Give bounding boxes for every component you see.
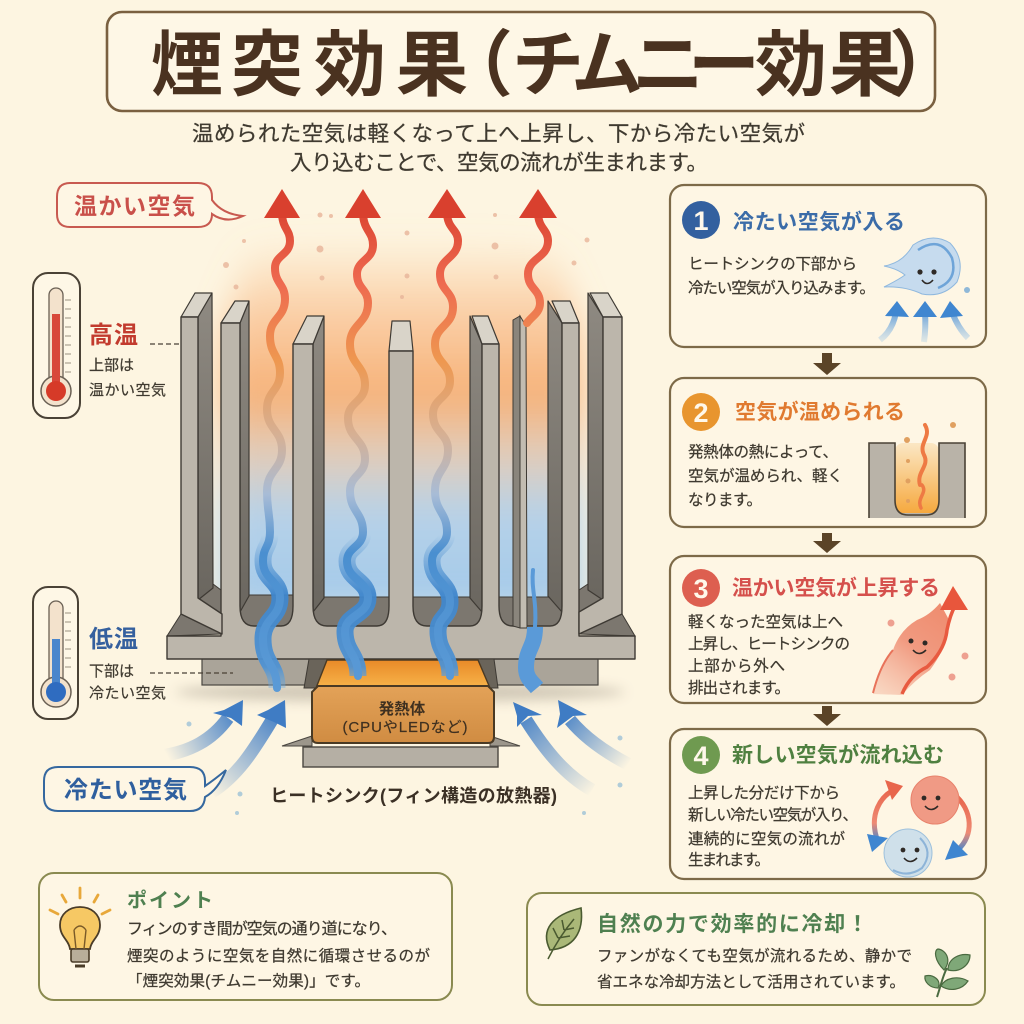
point text: 「煙突効果(チムニー効果)」です。	[127, 972, 370, 990]
step 4 text: 連続的に空気の流れが	[688, 830, 845, 848]
step 3 text: 排出されます。	[688, 679, 790, 697]
label: high temperature: 高温	[89, 322, 138, 349]
cold air inflow arrows	[160, 700, 628, 792]
icon: light bulb	[50, 888, 110, 966]
natural cooling text: ファンがなくても空気が流れるため、静かで	[597, 947, 912, 965]
icon: cool air character	[880, 238, 970, 342]
callout: warm air: 温かい空気	[74, 193, 195, 219]
step 4 text: 上昇した分だけ下から	[688, 784, 840, 802]
point heading: ポイント	[127, 889, 213, 912]
step 1 heading: 冷たい空気が入る	[733, 210, 905, 234]
heat source label	[342, 700, 468, 736]
intro text	[192, 122, 805, 175]
callout: cool air: 冷たい空気	[64, 777, 187, 804]
callout: cool air	[44, 767, 226, 811]
title: 煙突効果（チムニー効果）	[151, 26, 961, 106]
thermometer: high temperature	[33, 273, 80, 418]
step 2 text: なります。	[688, 491, 762, 509]
warm and cool air glow	[222, 238, 582, 612]
top face	[316, 660, 490, 688]
arrow: step 2 to 3	[813, 533, 841, 553]
step 4 number: 4	[693, 741, 709, 771]
callout: warm air	[57, 183, 243, 227]
label: low temperature: 低温	[89, 626, 138, 653]
point text: フィンのすき間が空気の通り道になり、	[127, 920, 397, 938]
step 1 text	[688, 255, 875, 297]
intro text: 温められた空気は軽くなって上へ上昇し、下から冷たい空気が	[192, 122, 805, 146]
outer left fin	[181, 317, 222, 634]
heat source label: (CPUやLEDなど)	[342, 719, 468, 736]
step 4 text: 生まれます。	[688, 851, 770, 869]
lower block	[202, 652, 598, 685]
inflow arrow right 2	[557, 700, 628, 764]
panel: step 1	[670, 185, 986, 347]
panel: step 4	[670, 729, 986, 879]
icon: plant	[925, 949, 970, 997]
step 2 heading: 空気が温められる	[735, 400, 905, 424]
heat source label: 発熱体	[379, 700, 426, 718]
step 3 heading: 温かい空気が上昇する	[732, 576, 940, 600]
icon: warm air character	[873, 586, 968, 695]
rising arrow 1	[263, 189, 300, 688]
natural cooling text	[597, 947, 912, 991]
shadow under heat sink	[175, 682, 625, 702]
point text: 煙突のように空気を自然に循環させるのが	[127, 947, 430, 965]
step 4 text	[688, 784, 858, 869]
point text	[127, 920, 430, 990]
fin floors	[167, 584, 635, 636]
step 1 text: ヒートシンクの下部から	[688, 255, 857, 273]
label: low temperature: 冷たい空気	[89, 685, 166, 702]
label: high temperature: 上部は	[89, 357, 134, 374]
rising air arrows	[263, 189, 557, 688]
panel: natural cooling	[527, 893, 985, 1005]
fin top faces	[181, 293, 212, 317]
panel: heat sink	[167, 293, 635, 702]
icon: leaf	[547, 908, 582, 959]
icon: heated channel	[869, 422, 965, 518]
panel: step 2	[670, 378, 986, 527]
step 2 text: 発熱体の熱によって、	[688, 443, 838, 461]
step 2 number	[682, 393, 720, 431]
label: low temperature	[89, 626, 233, 702]
side tabs	[304, 659, 327, 688]
step 2 number: 2	[693, 398, 709, 428]
step 2 text: 空気が温められ、軽く	[688, 467, 843, 485]
front face	[312, 686, 494, 743]
natural cooling text: 省エネな冷却方法として活用されています。	[597, 973, 905, 991]
natural cooling heading: 自然の力で効率的に冷却！	[597, 912, 868, 936]
label: high temperature	[89, 322, 181, 399]
step 4 number	[682, 736, 720, 774]
thermometer: low temperature	[33, 587, 78, 719]
step 3 text	[688, 613, 850, 697]
step 1 number	[682, 201, 720, 239]
bottom plate	[303, 747, 498, 767]
step 1 number: 1	[693, 206, 709, 236]
rising arrow 3	[428, 189, 466, 676]
cool particles	[186, 722, 622, 815]
step 4 heading: 新しい空気が流れ込む	[732, 743, 944, 767]
step 2 text	[688, 443, 843, 509]
heat particles	[223, 212, 590, 299]
arrow: step 1 to 2	[813, 353, 841, 375]
inflow arrow left 2	[212, 700, 286, 792]
step 3 number: 3	[693, 574, 709, 604]
step 3 text: 軽くなった空気は上へ	[688, 613, 843, 631]
inflow arrow right 1	[513, 702, 592, 790]
fin side faces	[198, 293, 213, 600]
rising arrow 2	[345, 189, 381, 676]
outer right fin	[579, 317, 622, 634]
panel: point	[39, 873, 452, 1000]
step 3 text: 上昇し、ヒートシンクの	[688, 635, 850, 653]
step 3 text: 上部から外へ	[688, 657, 785, 675]
step 4 text: 新しい冷たい空気が入り、	[688, 806, 858, 824]
intro text: 入り込むことで、空気の流れが生まれます。	[290, 151, 708, 175]
step 1 text: 冷たい空気が入り込みます。	[688, 279, 875, 297]
fin comb and base plate	[167, 323, 635, 659]
panel: step 3	[670, 556, 986, 703]
inflow arrow left 1	[160, 700, 243, 756]
arrow: step 3 to 4	[813, 706, 841, 726]
rising arrow 4	[519, 189, 557, 688]
icon: air cycle	[867, 776, 969, 877]
thin fin	[513, 316, 527, 628]
step 3 number	[682, 569, 720, 607]
label: low temperature: 下部は	[89, 663, 134, 680]
heat source	[282, 659, 520, 767]
label: high temperature: 温かい空気	[89, 382, 166, 399]
heat sink caption: ヒートシンク(フィン構造の放熱器)	[270, 786, 557, 806]
